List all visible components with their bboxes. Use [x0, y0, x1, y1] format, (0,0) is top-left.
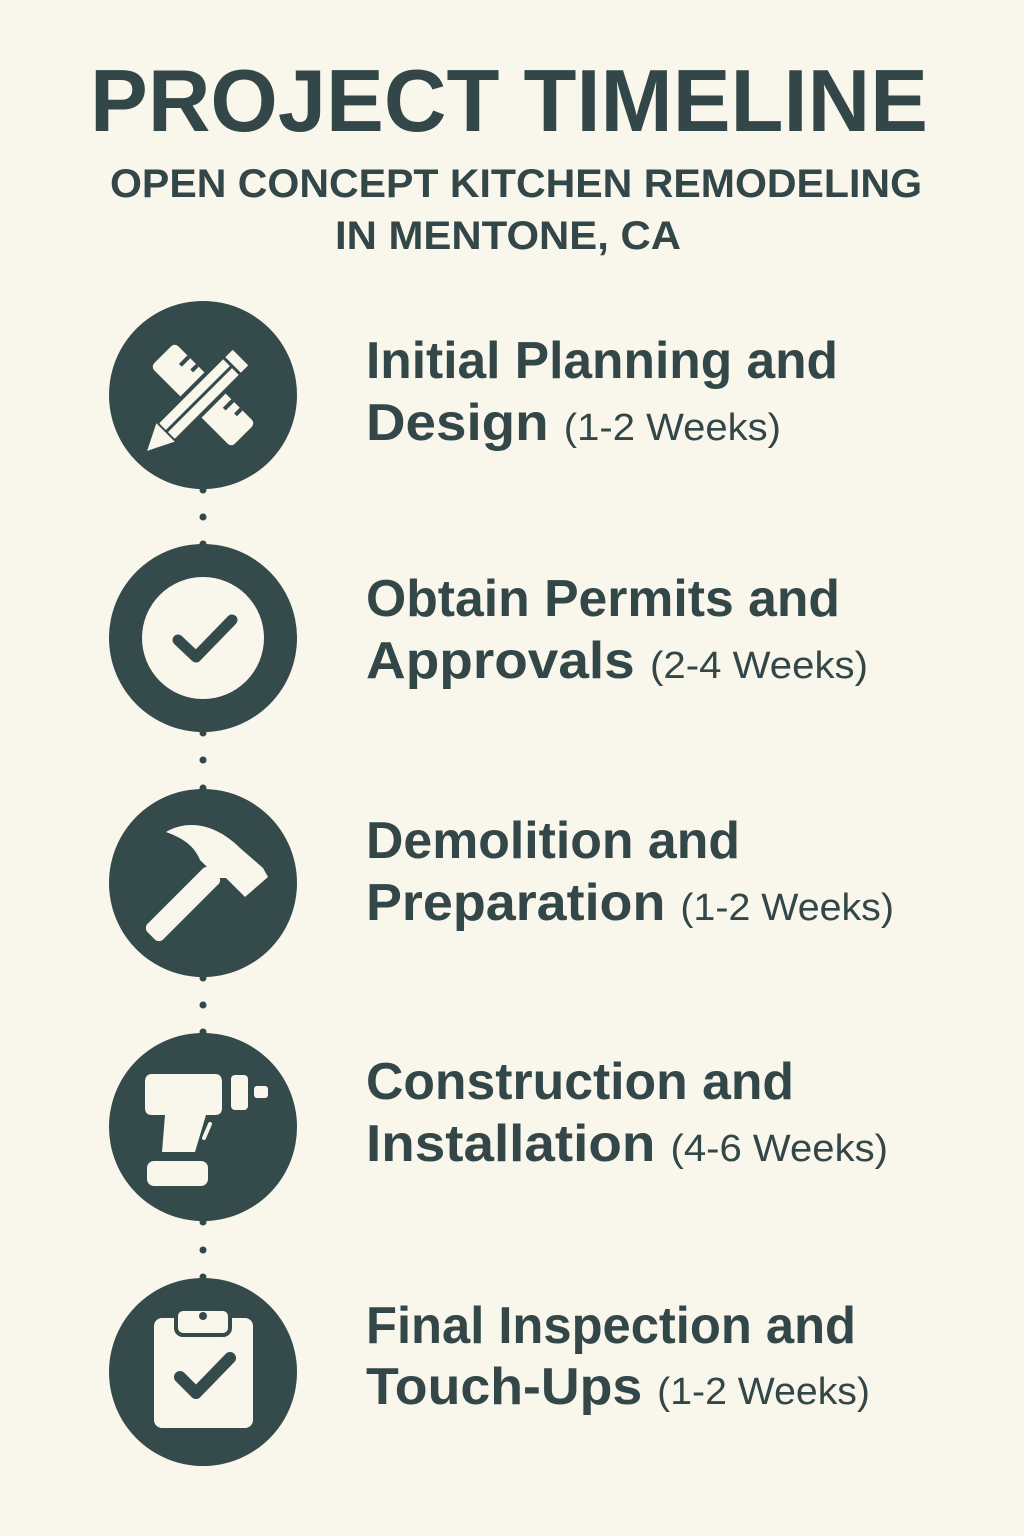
- icon: drill: [109, 1033, 297, 1221]
- step 4 text: Installation (4-6 Weeks): [366, 1115, 888, 1173]
- step 2 text: Obtain Permits and: [366, 570, 840, 628]
- step 2 text: [366, 570, 868, 690]
- step 3 text: Preparation (1-2 Weeks): [366, 874, 894, 932]
- step 4 text: [366, 1053, 888, 1173]
- dotted timeline connector: [200, 486, 206, 1280]
- subtitle: IN MENTONE, CA: [335, 214, 681, 258]
- step 5 text: Touch-Ups (1-2 Weeks): [366, 1358, 870, 1416]
- title: PROJECT TIMELINE: [90, 51, 928, 150]
- step 4 text: Construction and: [366, 1053, 794, 1111]
- step 3 text: [366, 812, 894, 932]
- subtitle: OPEN CONCEPT KITCHEN REMODELING: [110, 162, 922, 206]
- step 1 text: Initial Planning and: [366, 332, 838, 390]
- subtitle: [110, 162, 922, 258]
- step 1 text: [366, 332, 838, 452]
- icon: check circle: [109, 544, 297, 732]
- icon: hammer: [109, 789, 297, 977]
- step 5 text: Final Inspection and: [366, 1297, 856, 1355]
- icon: clipboard check: [109, 1278, 297, 1466]
- step 2 text: Approvals (2-4 Weeks): [366, 632, 868, 690]
- step 5 text: [366, 1297, 870, 1416]
- step 3 text: Demolition and: [366, 812, 740, 870]
- icon: pencil and ruler: [109, 301, 297, 489]
- step 1 text: Design (1-2 Weeks): [366, 394, 781, 452]
